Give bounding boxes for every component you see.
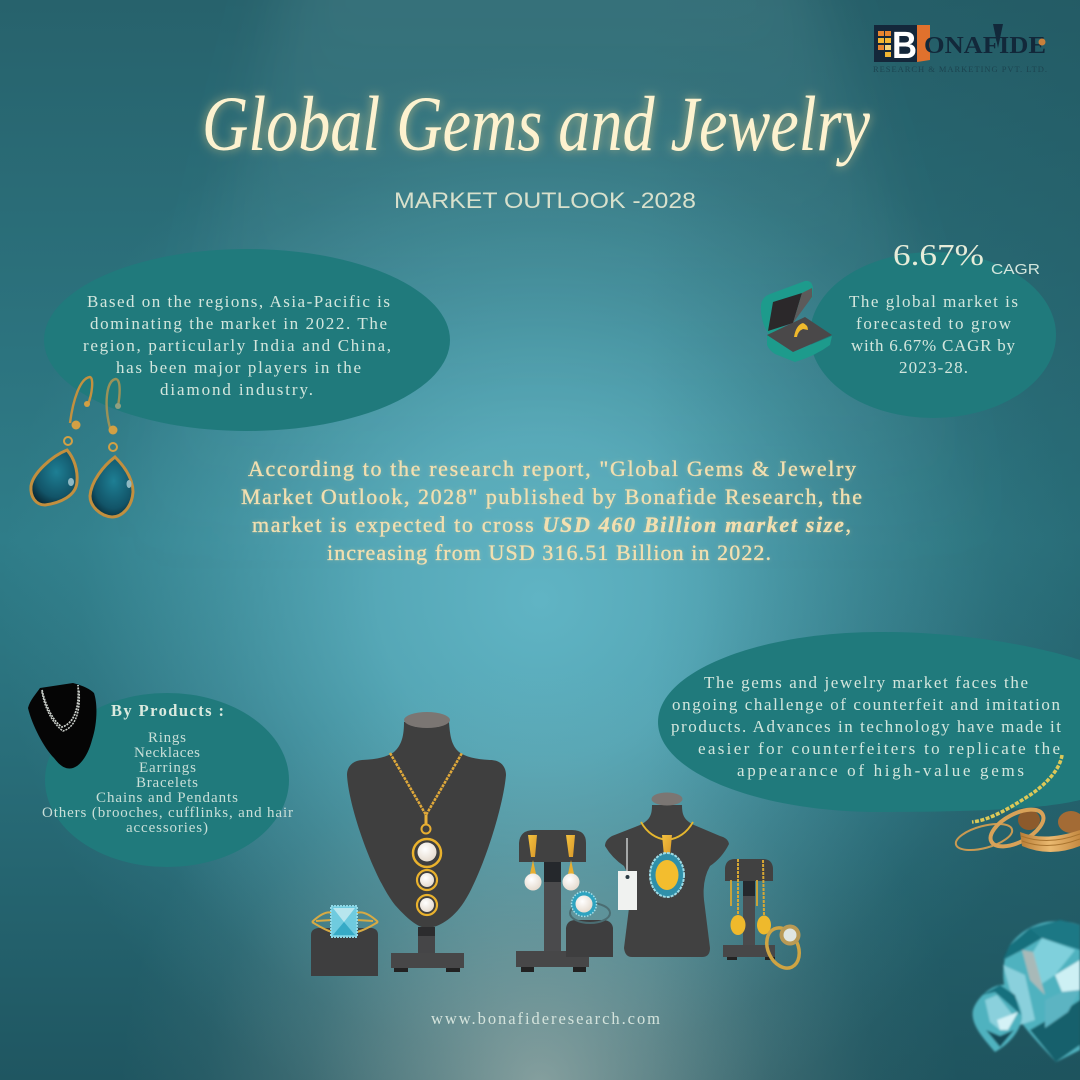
panel: regions: Based on the regions, Asia-Pacific is [87,292,390,311]
panel: products: Earrings [139,760,196,776]
panel: products: Rings [148,730,186,746]
panel: products: Bracelets [136,775,198,791]
icon: black necklace bust [28,683,96,769]
panel: counterfeit challenge: appearance of high-value gems [737,761,1024,780]
panel: counterfeit challenge: ongoing challenge of counterfeit and imitation [672,695,1060,714]
panel: counterfeit challenge: products. Advances in technology have made it [671,717,1061,736]
panel: products: accessories) [126,820,208,836]
earring stand [516,830,589,972]
panel: regions: diamond industry. [160,380,313,399]
pendant bust and price tag [605,792,729,957]
panel: CAGR: The global market is [849,292,1018,311]
panel: regions [44,249,450,431]
icon: drop earrings [31,377,133,517]
panel: regions: dominating the market in 2022. The [90,314,387,333]
icon: bracelets and chain [953,755,1080,855]
panel: CAGR: forecasted to grow [856,314,1012,333]
central paragraph [241,456,862,565]
website url: www.bonafideresearch.com [431,1009,660,1028]
pearl ring on stand [566,892,613,957]
panel: CAGR: CAGR [991,261,1040,278]
panel: CAGR: with 6.67% CAGR by [851,336,1016,355]
company logo: RESEARCH & MARKETING PVT. LTD. [873,64,1047,74]
icon: teal gems [973,920,1080,1062]
subtitle: MARKET OUTLOOK -2028 [394,188,696,213]
panel: products: Others (brooches, cufflinks, and hair [42,805,293,821]
panel: counterfeit challenge: easier for counterfeiters to replicate the [698,739,1060,758]
central paragraph: market is expected to cross USD 460 Billion market size, [252,512,851,537]
title: Global Gems and Jewelry [202,80,870,167]
panel: products: Chains and Pendants [96,790,238,806]
icon: ring box [761,281,832,362]
square gem ring [311,906,378,976]
jewelry display group [311,712,805,976]
panel: products: Necklaces [134,745,200,761]
company logo: ONAFIDE [924,33,1046,59]
central paragraph: increasing from USD 316.51 Billion in 2022. [327,540,771,565]
panel: CAGR [810,237,1056,418]
company logo [873,24,1047,74]
panel: counterfeit challenge: The gems and jewelry market faces the [704,673,1028,692]
panel: products [42,693,293,867]
panel: CAGR: 2023-28. [899,358,968,377]
small earring stand and diamond ring [723,859,805,973]
products heading: By Products : [111,701,224,720]
central paragraph: Market Outlook, 2028" published by Bonafide Research, the [241,484,862,509]
panel: regions: region, particularly India and China, [83,336,391,355]
panel: counterfeit challenge [658,632,1080,812]
central paragraph: According to the research report, "Global Gems & Jewelry [248,456,856,481]
company logo: B [892,25,917,67]
large necklace bust [347,712,506,972]
CAGR value: 6.67% [893,237,984,272]
panel: regions: has been major players in the [116,358,361,377]
